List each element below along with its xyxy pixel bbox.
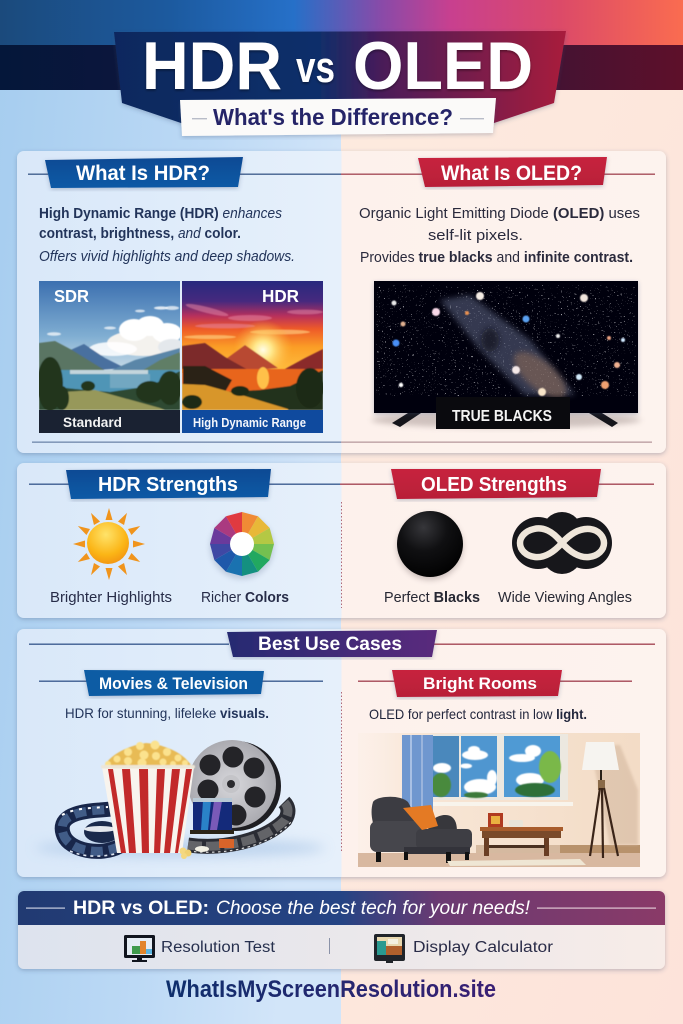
icon: monitor (display calculator) <box>374 934 405 963</box>
image: OLED TV with galaxy <box>371 281 641 429</box>
section header: What Is OLED <box>341 157 655 187</box>
image: SDR landscape <box>37 281 186 411</box>
link: Resolution Test: Resolution Test <box>161 939 276 956</box>
section header: HDR Strengths <box>66 469 271 499</box>
section header: What Is HDR <box>28 157 341 188</box>
text: OLED description: Organic Light Emitting Diode (OLED) uses <box>359 206 640 222</box>
text: HDR description <box>39 206 295 265</box>
sub header: Bright Rooms <box>358 670 632 697</box>
text: HDR description: High Dynamic Range (HDR) enhances <box>39 206 282 222</box>
title: HDR vs OLED <box>142 28 533 104</box>
panel: best use cases <box>17 629 666 877</box>
caption: High Dynamic Range: High Dynamic Range <box>193 416 306 430</box>
label: Richer Colors: Richer Colors <box>201 590 289 606</box>
section header: OLED Strengths <box>391 469 601 499</box>
subtitle ribbon: What's the Difference? <box>213 104 453 130</box>
icon: color wheel <box>210 512 274 579</box>
section header: Best Use Cases <box>227 630 437 657</box>
website footer: WhatIsMyScreenResolution.site <box>166 976 496 1003</box>
footer header: HDR vs OLED: <box>73 898 209 919</box>
sub header: Movies & Television <box>39 670 323 696</box>
illustration: living room <box>358 733 640 867</box>
illustration: popcorn and film reel <box>35 740 325 859</box>
label: HDR: HDR <box>262 286 299 306</box>
spilled popcorn <box>180 846 209 859</box>
text: OLED use case: OLED for perfect contrast in low light. <box>369 706 587 722</box>
icon: monitor (resolution test) <box>124 935 155 962</box>
film strip left <box>62 807 120 856</box>
subtitle ribbon <box>180 98 496 136</box>
panel: strengths <box>17 463 666 618</box>
image: HDR landscape <box>182 281 324 410</box>
section header: OLED Strengths: OLED Strengths <box>421 473 567 496</box>
table <box>480 827 563 856</box>
footer header <box>18 891 665 925</box>
link: Display Calculator: Display Calculator <box>413 939 553 956</box>
icon: sun <box>73 508 145 580</box>
text: HDR description: contrast, brightness, and color. <box>39 226 241 242</box>
icon: black sphere <box>397 511 463 580</box>
text: OLED description: self-lit pixels. <box>428 228 523 244</box>
icon: infinity <box>512 512 612 574</box>
panel: footer call to action <box>18 891 665 969</box>
label: Brighter Highlights: Brighter Highlights <box>50 590 172 606</box>
title: HDR vs OLED: HDR <box>142 28 282 104</box>
section header: What Is HDR: What Is HDR? <box>76 161 210 185</box>
glass <box>190 798 234 834</box>
curtain <box>402 735 433 811</box>
text: OLED description: Provides true blacks and infinite contrast. <box>360 250 633 266</box>
text: OLED description <box>359 206 640 266</box>
armchair <box>370 797 472 863</box>
picture frame <box>488 813 523 827</box>
film strip right <box>188 802 291 852</box>
section header: What Is OLED: What Is OLED? <box>441 161 582 185</box>
text: HDR use case: HDR for stunning, lifeleke visuals. <box>65 705 269 721</box>
window <box>430 734 568 800</box>
panel: what is HDR / OLED <box>17 151 666 453</box>
title: HDR vs OLED: OLED <box>353 28 533 104</box>
section header: Best Use Cases: Best Use Cases <box>258 633 402 655</box>
label: TRUE BLACKS <box>436 397 570 429</box>
caption: Standard <box>39 410 180 433</box>
label: Wide Viewing Angles: Wide Viewing Angles <box>498 590 632 606</box>
caption: High Dynamic Range <box>182 410 323 433</box>
lamp <box>582 742 619 858</box>
popcorn <box>101 740 195 768</box>
label: SDR: SDR <box>54 286 89 306</box>
title banner <box>114 28 566 136</box>
text: HDR description: Offers vivid highlights and deep shadows. <box>39 249 295 265</box>
sub header: Movies & Television: Movies & Television <box>99 674 248 693</box>
label: Perfect Blacks: Perfect Blacks <box>384 590 480 606</box>
title: HDR vs OLED: vs <box>296 43 335 92</box>
film reel <box>188 740 281 831</box>
popcorn bucket <box>102 767 194 853</box>
sub header: Bright Rooms: Bright Rooms <box>423 674 537 693</box>
section header: HDR Strengths: HDR Strengths <box>98 473 238 496</box>
caption: Standard: Standard <box>63 415 122 430</box>
label: TRUE BLACKS: TRUE BLACKS <box>452 408 552 425</box>
footer header: Choose the best tech for your needs! <box>216 898 531 919</box>
